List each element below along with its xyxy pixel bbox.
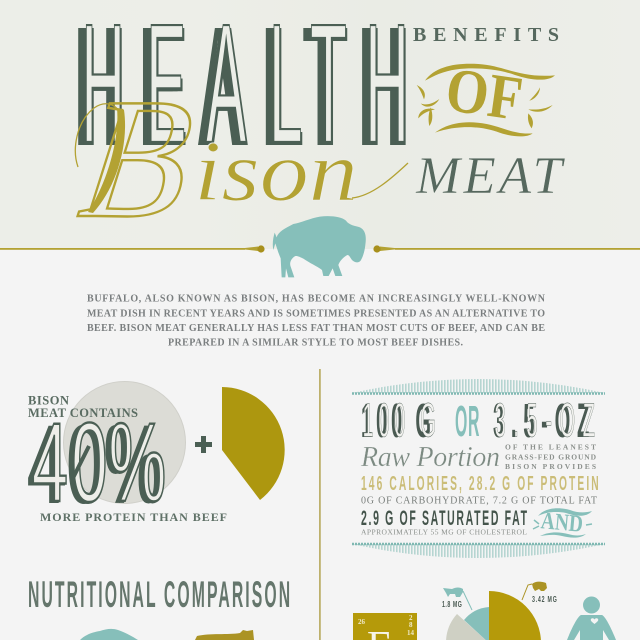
callout: bison 3.42 mg	[522, 582, 557, 604]
title	[71, 0, 566, 254]
intro paragraph: BEEF. BISON MEAT GENERALLY HAS LESS FAT THAN MOST CUTS OF BEEF, AND CAN BE	[87, 323, 545, 334]
fact: calories and protein: 146 CALORIES, 28.2 G OF PROTEIN	[361, 472, 601, 495]
text: of the leanest: BISON PROVIDES	[505, 462, 596, 471]
fact: carbohydrate and total fat: 0G OF CARBOHYDRATE, 7.2 G OF TOTAL FAT	[361, 496, 597, 506]
fact: saturated fat: 2.9 G OF SATURATED FAT	[361, 506, 527, 530]
title word: Bison script	[71, 64, 408, 254]
banner: OF	[417, 54, 555, 136]
element tile: iron: 14	[407, 629, 414, 637]
intro paragraph: MEAT DISH IN RECENT YEARS AND IS SOMETIMES PRESENTED AS AN ALTERNATIVE TO	[87, 308, 545, 320]
label: bison meat contains: MEAT CONTAINS	[28, 406, 138, 420]
label: bison meat contains: BISON	[28, 394, 69, 408]
intro paragraph: PREPARED IN A SIMILAR STYLE TO MOST BEEF DISHES.	[168, 338, 464, 348]
banner: OF: OF	[442, 54, 527, 134]
headline: 100 g or 3.5-oz: 100 G	[362, 393, 440, 447]
text: of the leanest: OF THE LEANEST	[505, 442, 596, 452]
element tile: iron	[353, 613, 417, 640]
chart: protein pie wedge	[222, 387, 285, 500]
intro paragraph: BUFFALO, ALSO KNOWN AS BISON, HAS BECOME AN INCREASINGLY WELL-KNOWN	[87, 294, 546, 304]
banner: and: AND	[540, 508, 584, 538]
icon: cow comparison	[195, 630, 254, 640]
callout: bison 3.42 mg: 3.42 MG	[532, 596, 557, 604]
heading: nutritional comparison: NUTRITIONAL COMPARISON	[28, 574, 290, 616]
title word: MEAT: MEAT	[415, 147, 566, 205]
icon: person with heart	[567, 596, 616, 640]
element tile: iron: 26	[358, 618, 366, 626]
panel: portion facts	[352, 379, 605, 558]
callout: beef 1.8 mg	[442, 588, 472, 610]
chart: iron pie	[446, 591, 541, 640]
headline: 100 g or 3.5-oz: 100 G	[361, 394, 435, 447]
divider line with bison	[0, 216, 640, 277]
text: of the leanest: GRASS-FED GROUND	[505, 452, 597, 462]
ornament: top stripes	[352, 379, 605, 394]
label: more protein than beef: MORE PROTEIN THAN BEEF	[40, 510, 227, 524]
fact: cholesterol: APPROXIMATELY 55 MG OF CHOLESTEROL	[361, 528, 527, 536]
title word: BENEFITS: BENEFITS	[413, 24, 559, 46]
ornament: bottom stripes	[352, 544, 605, 558]
text: of the leanest	[505, 442, 597, 471]
script: raw portion: Raw Portion	[360, 442, 500, 473]
stat: 40%: 40%	[31, 403, 165, 527]
stat: 40%: 40%	[27, 403, 161, 527]
panel: protein	[27, 382, 285, 527]
title word: Bison script: ison	[194, 123, 358, 219]
icon: bison silhouette	[273, 216, 366, 277]
icon: bison comparison	[80, 629, 138, 640]
element tile: iron: 8	[409, 621, 413, 629]
headline: 100 g or 3.5-oz	[361, 393, 603, 447]
callout: beef 1.8 mg: 1.8 MG	[442, 601, 462, 609]
title word: Bison script: B	[71, 64, 202, 254]
stat: 40%: 40%	[32, 401, 166, 525]
headline: 100 g or 3.5-oz: 3.5-OZ	[493, 394, 596, 447]
panel: iron comparison	[353, 582, 616, 640]
intro paragraph	[87, 294, 546, 348]
circle backdrop	[64, 382, 186, 504]
headline: 100 g or 3.5-oz: 3.5-OZ	[494, 393, 603, 447]
headline: 100 g or 3.5-oz: OR	[455, 397, 480, 447]
vertical divider	[319, 369, 321, 640]
element tile: iron: 2	[409, 614, 413, 622]
label: bison meat contains	[28, 394, 138, 420]
icon: plus	[195, 436, 212, 453]
